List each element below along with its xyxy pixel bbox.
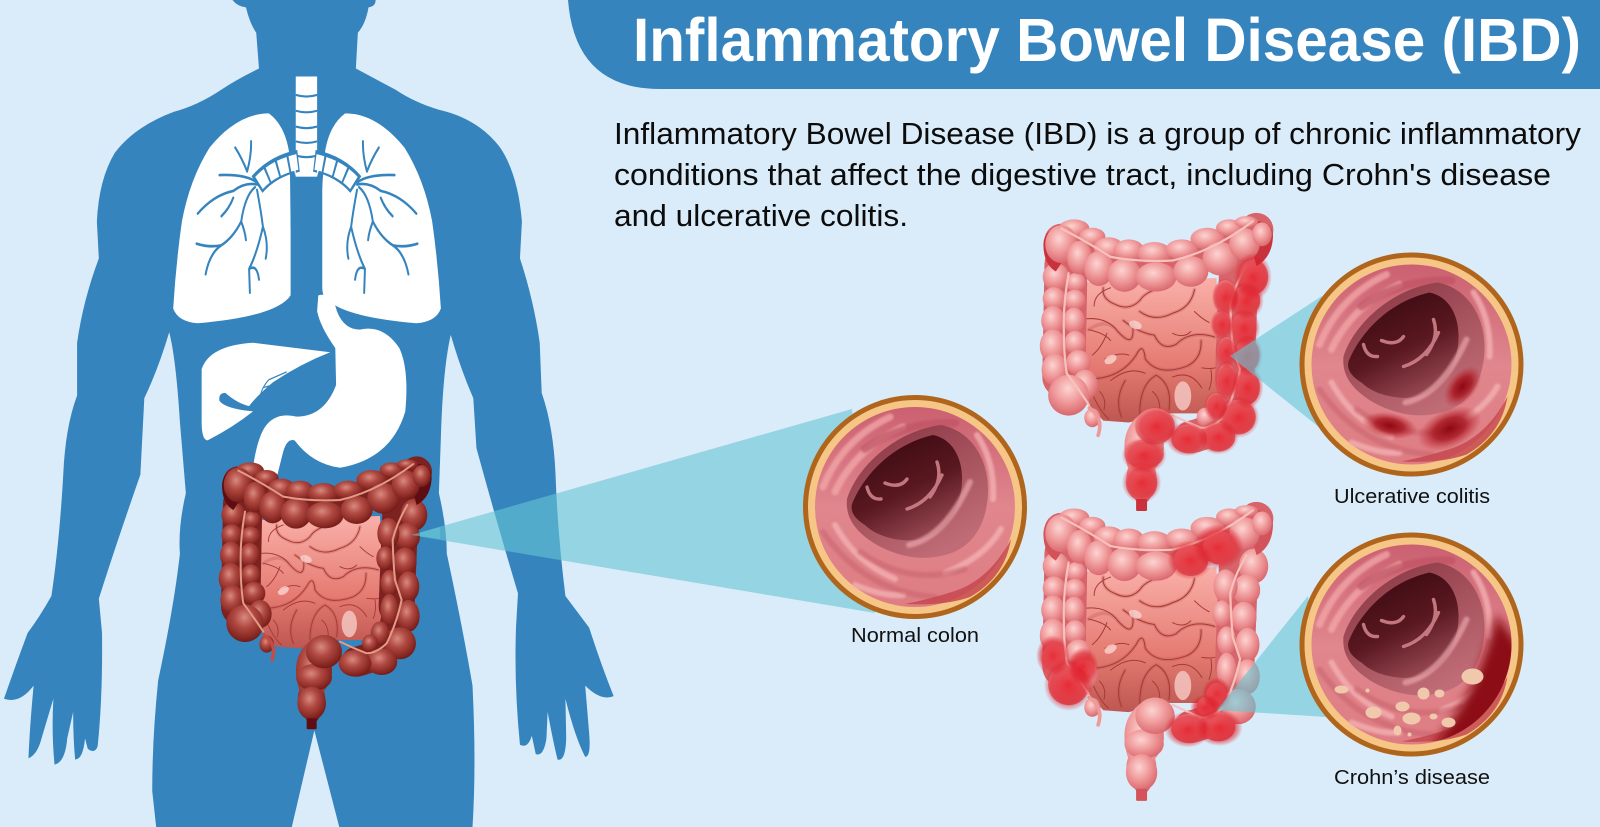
lens: ulcerative colitis [1302, 255, 1521, 474]
description text: Inflammatory Bowel Disease (IBD) is a group of chronic inflammatory [614, 116, 1582, 151]
header banner [568, 0, 1600, 89]
beam: colon to ulcerative colitis [1230, 296, 1322, 428]
bronchial tree [197, 141, 418, 293]
human body [4, 0, 614, 827]
label: ulcerative colitis: Ulcerative colitis [1334, 486, 1490, 508]
inflamed patches [1036, 524, 1244, 748]
lens: Crohn's disease [1302, 535, 1526, 754]
beam: colon to Crohn's disease [1217, 596, 1326, 717]
lungs [173, 113, 441, 323]
description text: conditions that affect the digestive tract, including Crohn's disease [614, 157, 1551, 192]
body silhouette with organs [4, 0, 614, 827]
intestine: Crohn's disease [1036, 505, 1273, 801]
trachea [257, 76, 356, 316]
description text: and ulcerative colitis. [614, 198, 908, 233]
liver [202, 343, 330, 440]
inflamed crescent [1430, 612, 1512, 742]
ulcers [1360, 359, 1489, 460]
label: Crohn's disease: Crohn’s disease [1334, 767, 1490, 789]
title: Inflammatory Bowel Disease (IBD) [633, 6, 1581, 74]
stomach and esophagus [253, 295, 406, 477]
beam tip over colon [411, 527, 440, 539]
lens: normal colon [806, 398, 1024, 616]
inflamed region [1122, 253, 1272, 503]
beam: body to normal colon [411, 409, 875, 613]
intestine: main body [219, 459, 432, 729]
cobblestone lesions [1334, 668, 1484, 736]
intestine: ulcerative colitis [1040, 216, 1273, 511]
description text [614, 116, 1582, 233]
label: normal colon: Normal colon [851, 625, 979, 647]
